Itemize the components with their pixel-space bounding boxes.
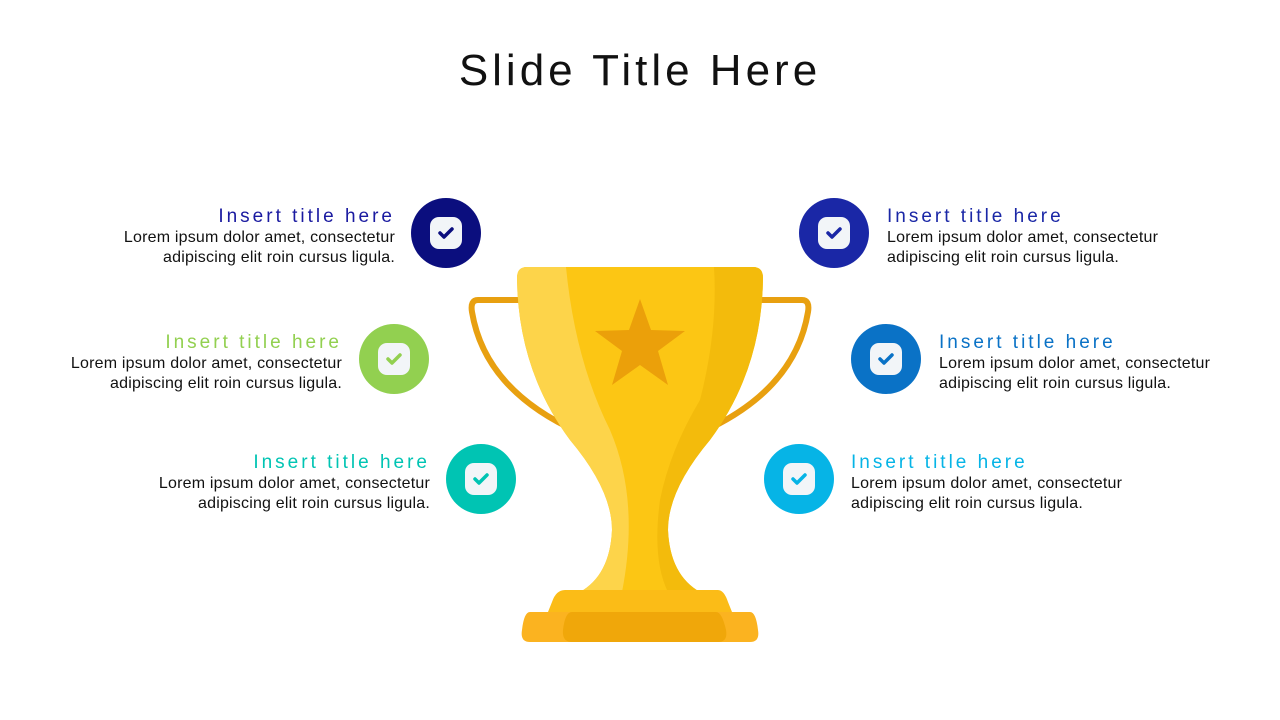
text block: right 1: adipiscing elit roin cursus ligula. xyxy=(887,248,1119,266)
text block: right 1: Lorem ipsum dolor amet, consectetur xyxy=(887,229,1158,246)
text block: right 3 xyxy=(851,452,1122,512)
icon: check mid blue xyxy=(851,324,921,394)
text block: left 2 xyxy=(71,332,342,392)
icon: check navy xyxy=(411,198,481,268)
text block: left 3 xyxy=(159,452,430,512)
text block: right 1: Insert title here xyxy=(887,206,1064,227)
text block: right 3: Insert title here xyxy=(851,452,1028,473)
icon: check green xyxy=(359,324,429,394)
text block: left 3: adipiscing elit roin cursus ligula. xyxy=(198,494,430,512)
text block: left 1 xyxy=(124,206,395,266)
text block: left 1: Lorem ipsum dolor amet, consectetur xyxy=(124,229,395,246)
text block: right 3: adipiscing elit roin cursus ligula. xyxy=(851,494,1083,512)
text block: right 2: Lorem ipsum dolor amet, consectetur xyxy=(939,355,1210,372)
icon: check blue xyxy=(799,198,869,268)
text block: left 2: Lorem ipsum dolor amet, consectetur xyxy=(71,355,342,372)
text block: right 2: Insert title here xyxy=(939,332,1116,353)
text block: right 2: adipiscing elit roin cursus ligula. xyxy=(939,374,1171,392)
text block: left 1: Insert title here xyxy=(218,206,395,227)
icon: check teal xyxy=(446,444,516,514)
text block: right 3: Lorem ipsum dolor amet, consectetur xyxy=(851,475,1122,492)
text block: right 2 xyxy=(939,332,1210,392)
text block: left 1: adipiscing elit roin cursus ligula. xyxy=(163,248,395,266)
icon: check cyan xyxy=(764,444,834,514)
text block: right 1 xyxy=(887,206,1158,266)
text block: left 2: adipiscing elit roin cursus ligula. xyxy=(110,374,342,392)
title: Slide Title Here xyxy=(459,46,821,95)
text block: left 3: Lorem ipsum dolor amet, consectetur xyxy=(159,475,430,492)
text block: left 3: Insert title here xyxy=(253,452,430,473)
text block: left 2: Insert title here xyxy=(165,332,342,353)
